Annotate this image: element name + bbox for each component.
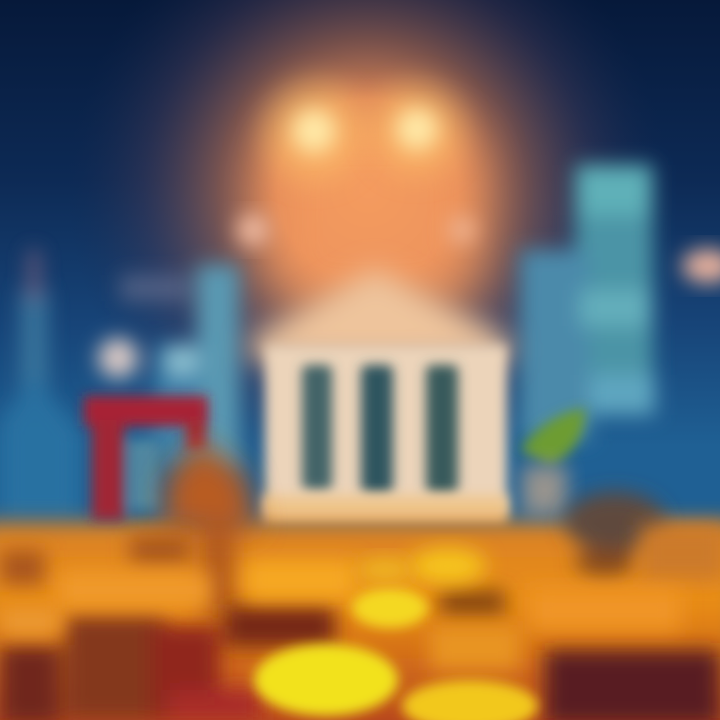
bank pediment bbox=[250, 268, 510, 360]
far right cloud bbox=[682, 249, 720, 283]
coin: upper bbox=[410, 548, 486, 584]
central orange glow bbox=[40, 0, 700, 500]
lights: two bright lamps bbox=[264, 81, 463, 181]
gold coins bbox=[254, 548, 538, 720]
bank windows bbox=[302, 365, 458, 493]
bank building bbox=[250, 268, 510, 525]
skyline: left buildings bbox=[98, 265, 239, 475]
coin: bottom right bbox=[402, 680, 538, 720]
green leaf bbox=[520, 408, 585, 465]
red arch bbox=[84, 396, 208, 520]
ground texture: bright orange planks bbox=[0, 560, 680, 670]
bank base bbox=[262, 495, 508, 525]
small lights beside the bank bbox=[237, 214, 476, 246]
ground texture: dark patches bbox=[0, 525, 720, 720]
skyline: right buildings bbox=[520, 165, 655, 440]
coin: faint bbox=[357, 558, 413, 582]
ground bbox=[0, 522, 720, 720]
coin: mid bbox=[352, 588, 428, 628]
coin: large front bbox=[254, 644, 398, 716]
brown figure bbox=[165, 440, 258, 620]
dark coins right bbox=[565, 492, 665, 576]
plant pot bbox=[522, 465, 567, 515]
glow core bbox=[270, 120, 480, 310]
bank body bbox=[265, 345, 507, 515]
skyline: left tower bbox=[0, 250, 80, 520]
